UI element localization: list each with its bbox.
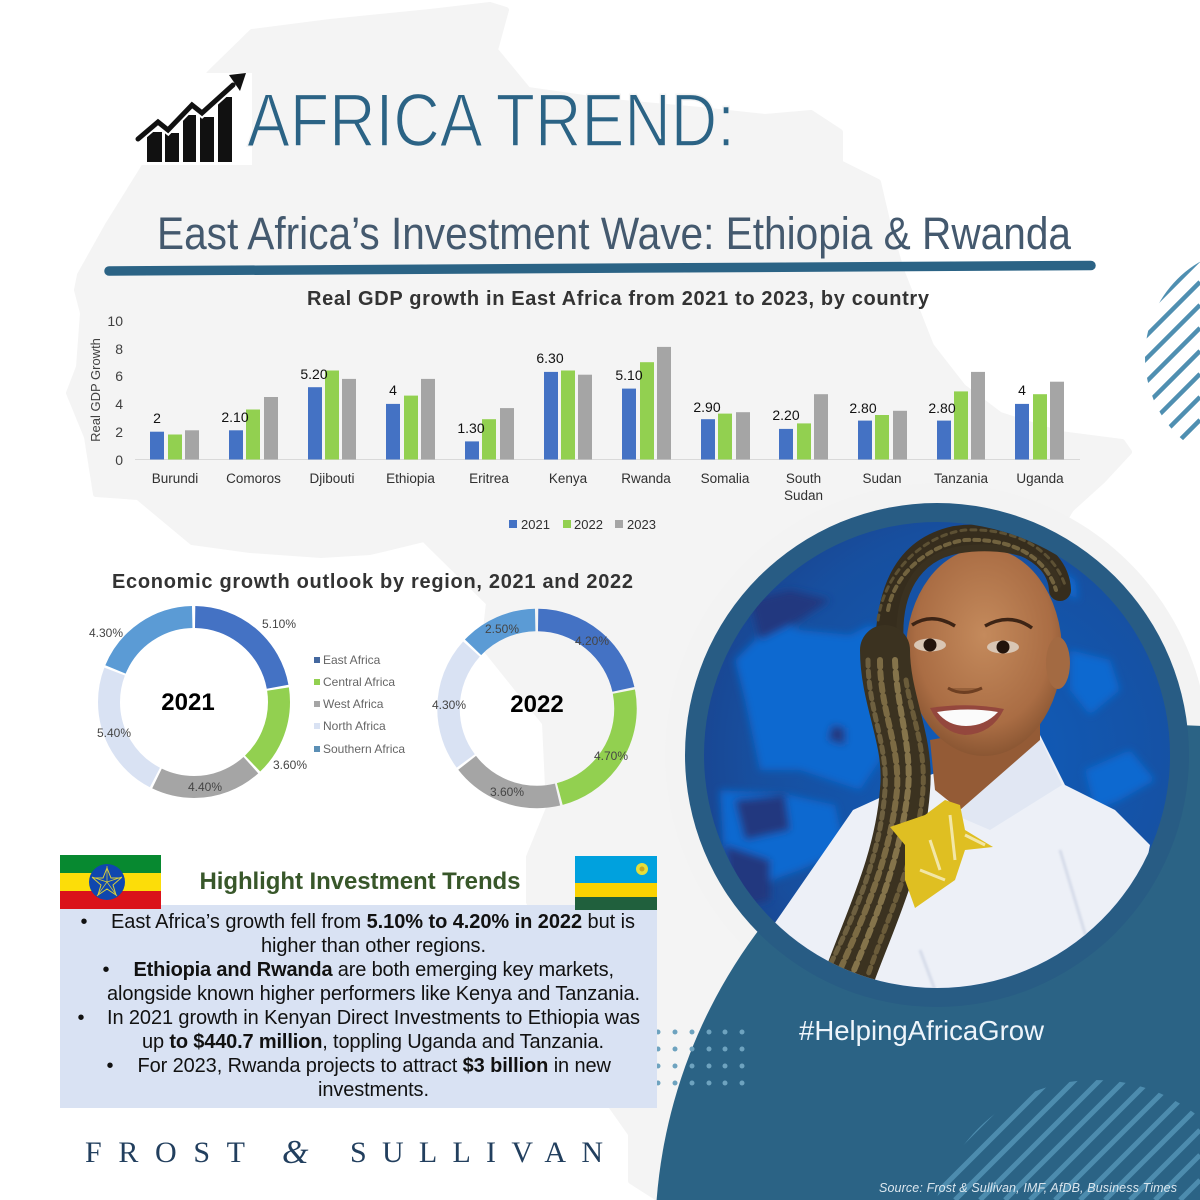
decoration: dot grid bbox=[656, 1030, 744, 1086]
bullet list bbox=[77, 911, 640, 1101]
decoration: striped circle upper right bbox=[1145, 262, 1200, 440]
donut chart: 2021: 5.40% bbox=[97, 726, 131, 740]
hashtag: #HelpingAfricaGrow bbox=[799, 1015, 1045, 1046]
data labels: 5.10 bbox=[615, 367, 643, 383]
title: AFRICA TREND: bbox=[247, 78, 735, 162]
category labels: Rwanda bbox=[621, 471, 671, 486]
legend: 2023 bbox=[627, 517, 656, 532]
text box background bbox=[60, 905, 657, 1108]
2021 bars bbox=[150, 372, 1029, 460]
category labels: Sudan bbox=[784, 488, 823, 503]
bullet list: East Africa’s growth fell from 5.10% to 4.20% in 2022 but is bbox=[111, 911, 635, 933]
neck bbox=[930, 720, 1040, 810]
subtitle: East Africa’s Investment Wave: Ethiopia & Rwanda bbox=[157, 208, 1072, 259]
legend bbox=[509, 517, 656, 532]
donut legend: West Africa bbox=[323, 697, 384, 711]
donut chart: 2021: 4.40% bbox=[188, 780, 222, 794]
shirt bbox=[770, 735, 1150, 990]
bullet list: • bbox=[80, 911, 88, 933]
donut legend: Southern Africa bbox=[323, 742, 405, 756]
nose bbox=[948, 688, 982, 692]
category labels: South bbox=[786, 471, 821, 486]
category labels: Burundi bbox=[152, 471, 198, 486]
category labels bbox=[152, 471, 1064, 503]
data labels: 2.10 bbox=[221, 409, 249, 425]
data labels: 2.20 bbox=[772, 407, 800, 423]
donut chart: 2021 bbox=[89, 617, 307, 794]
bullet list: up to $440.7 million, toppling Uganda and Tanzania. bbox=[142, 1031, 604, 1053]
category labels: Eritrea bbox=[469, 471, 509, 486]
y axis labels: 8 bbox=[115, 341, 123, 357]
photo halo bbox=[665, 483, 1200, 1027]
y axis labels bbox=[107, 313, 123, 468]
eyes bbox=[914, 638, 1019, 654]
title underline bbox=[109, 266, 1091, 271]
category labels: Tanzania bbox=[934, 471, 989, 486]
y axis labels: 4 bbox=[115, 396, 123, 412]
world map pattern bbox=[720, 570, 1155, 910]
donut chart: 2022: 4.20% bbox=[575, 634, 609, 648]
logo: Frost & Sullivan: & bbox=[282, 1134, 309, 1171]
donut chart: 2021: 4.30% bbox=[89, 626, 123, 640]
logo: Frost & Sullivan bbox=[85, 1134, 603, 1171]
yellow bow bbox=[890, 800, 993, 908]
logo: Frost & Sullivan: FROST bbox=[85, 1136, 245, 1169]
donut chart: 2022: 2022 bbox=[510, 691, 564, 718]
donut chart: 2021: 2021 bbox=[161, 689, 215, 716]
donut chart: 2021: 3.60% bbox=[273, 758, 307, 772]
data labels: 6.30 bbox=[536, 350, 564, 366]
category labels: Somalia bbox=[701, 471, 750, 486]
y axis labels: 6 bbox=[115, 368, 123, 384]
data labels: 2.80 bbox=[849, 400, 877, 416]
bullet list: In 2021 growth in Kenyan Direct Investments to Ethiopia was bbox=[107, 1007, 640, 1029]
data labels: 1.30 bbox=[457, 420, 485, 436]
y axis title: Real GDP Growth bbox=[88, 338, 103, 442]
flag: Ethiopia bbox=[60, 855, 161, 909]
y axis labels: 2 bbox=[115, 424, 123, 440]
2023 bars bbox=[185, 347, 1064, 460]
bullet list: alongside known higher performers like Kenya and Tanzania. bbox=[107, 983, 640, 1005]
flag: Rwanda bbox=[575, 856, 657, 910]
donut legend: North Africa bbox=[323, 719, 386, 733]
donut chart: 2022: 4.70% bbox=[594, 749, 628, 763]
bullet list: higher than other regions. bbox=[261, 935, 486, 957]
icon: rising bar chart with arrow bbox=[135, 73, 252, 165]
category labels: Sudan bbox=[862, 471, 902, 486]
logo: Frost & Sullivan: SULLIVAN bbox=[350, 1136, 603, 1169]
category labels: Djibouti bbox=[309, 471, 355, 486]
data labels bbox=[153, 350, 1026, 436]
data labels: 2 bbox=[153, 410, 161, 426]
braided hair bbox=[830, 530, 1065, 975]
decoration: striped circle lower right bbox=[938, 1080, 1200, 1200]
data labels: 4 bbox=[1018, 382, 1026, 398]
bullet list: For 2023, Rwanda projects to attract $3 billion in new bbox=[138, 1055, 612, 1077]
data labels: 5.20 bbox=[300, 366, 328, 382]
bullet list: • bbox=[102, 959, 110, 981]
donut chart: 2022: 3.60% bbox=[490, 785, 524, 799]
dark blue corner shape bbox=[657, 725, 1200, 1200]
category labels: Comoros bbox=[226, 471, 281, 486]
donut chart: 2022: 2.50% bbox=[485, 622, 519, 636]
data labels: 4 bbox=[389, 382, 397, 398]
category labels: Ethiopia bbox=[386, 471, 435, 486]
legend: 2021 bbox=[521, 517, 550, 532]
ear bbox=[1046, 637, 1070, 689]
panel: highlight investment trends bbox=[60, 855, 657, 1108]
bullet list: • bbox=[106, 1055, 114, 1077]
data labels: 2.90 bbox=[693, 399, 721, 415]
bullet list: Ethiopia and Rwanda are both emerging key markets, bbox=[134, 959, 614, 981]
donut chart: 2022: 4.30% bbox=[432, 698, 466, 712]
2022 bars bbox=[168, 362, 1047, 460]
heading: Highlight Investment Trends bbox=[200, 868, 520, 895]
donut legend: East Africa bbox=[323, 653, 381, 667]
y axis labels: 10 bbox=[107, 313, 123, 329]
y axis labels: 0 bbox=[115, 452, 123, 468]
chart title: Real GDP growth in East Africa from 2021 to 2023, by country bbox=[307, 288, 930, 310]
face bbox=[906, 548, 1062, 756]
donut chart: 2022 bbox=[432, 620, 628, 799]
bullet list: • bbox=[77, 1007, 85, 1029]
bullet list: investments. bbox=[318, 1079, 429, 1101]
heading: regional outlook: Economic growth outlook by region, 2021 and 2022 bbox=[112, 571, 633, 593]
data labels: 2.80 bbox=[928, 400, 956, 416]
eyebrows bbox=[912, 619, 1032, 628]
category labels: Kenya bbox=[549, 471, 588, 486]
source note: Source: Frost & Sullivan, IMF, AfDB, Business Times bbox=[879, 1181, 1177, 1195]
donut legend: Central Africa bbox=[323, 675, 395, 689]
category labels: Uganda bbox=[1016, 471, 1064, 486]
donut legend bbox=[314, 653, 405, 756]
smile bbox=[930, 705, 1004, 735]
legend: 2022 bbox=[574, 517, 603, 532]
portrait photo bbox=[685, 503, 1189, 1007]
donut chart: 2021: 5.10% bbox=[262, 617, 296, 631]
bar chart: real GDP growth bbox=[88, 288, 1080, 532]
